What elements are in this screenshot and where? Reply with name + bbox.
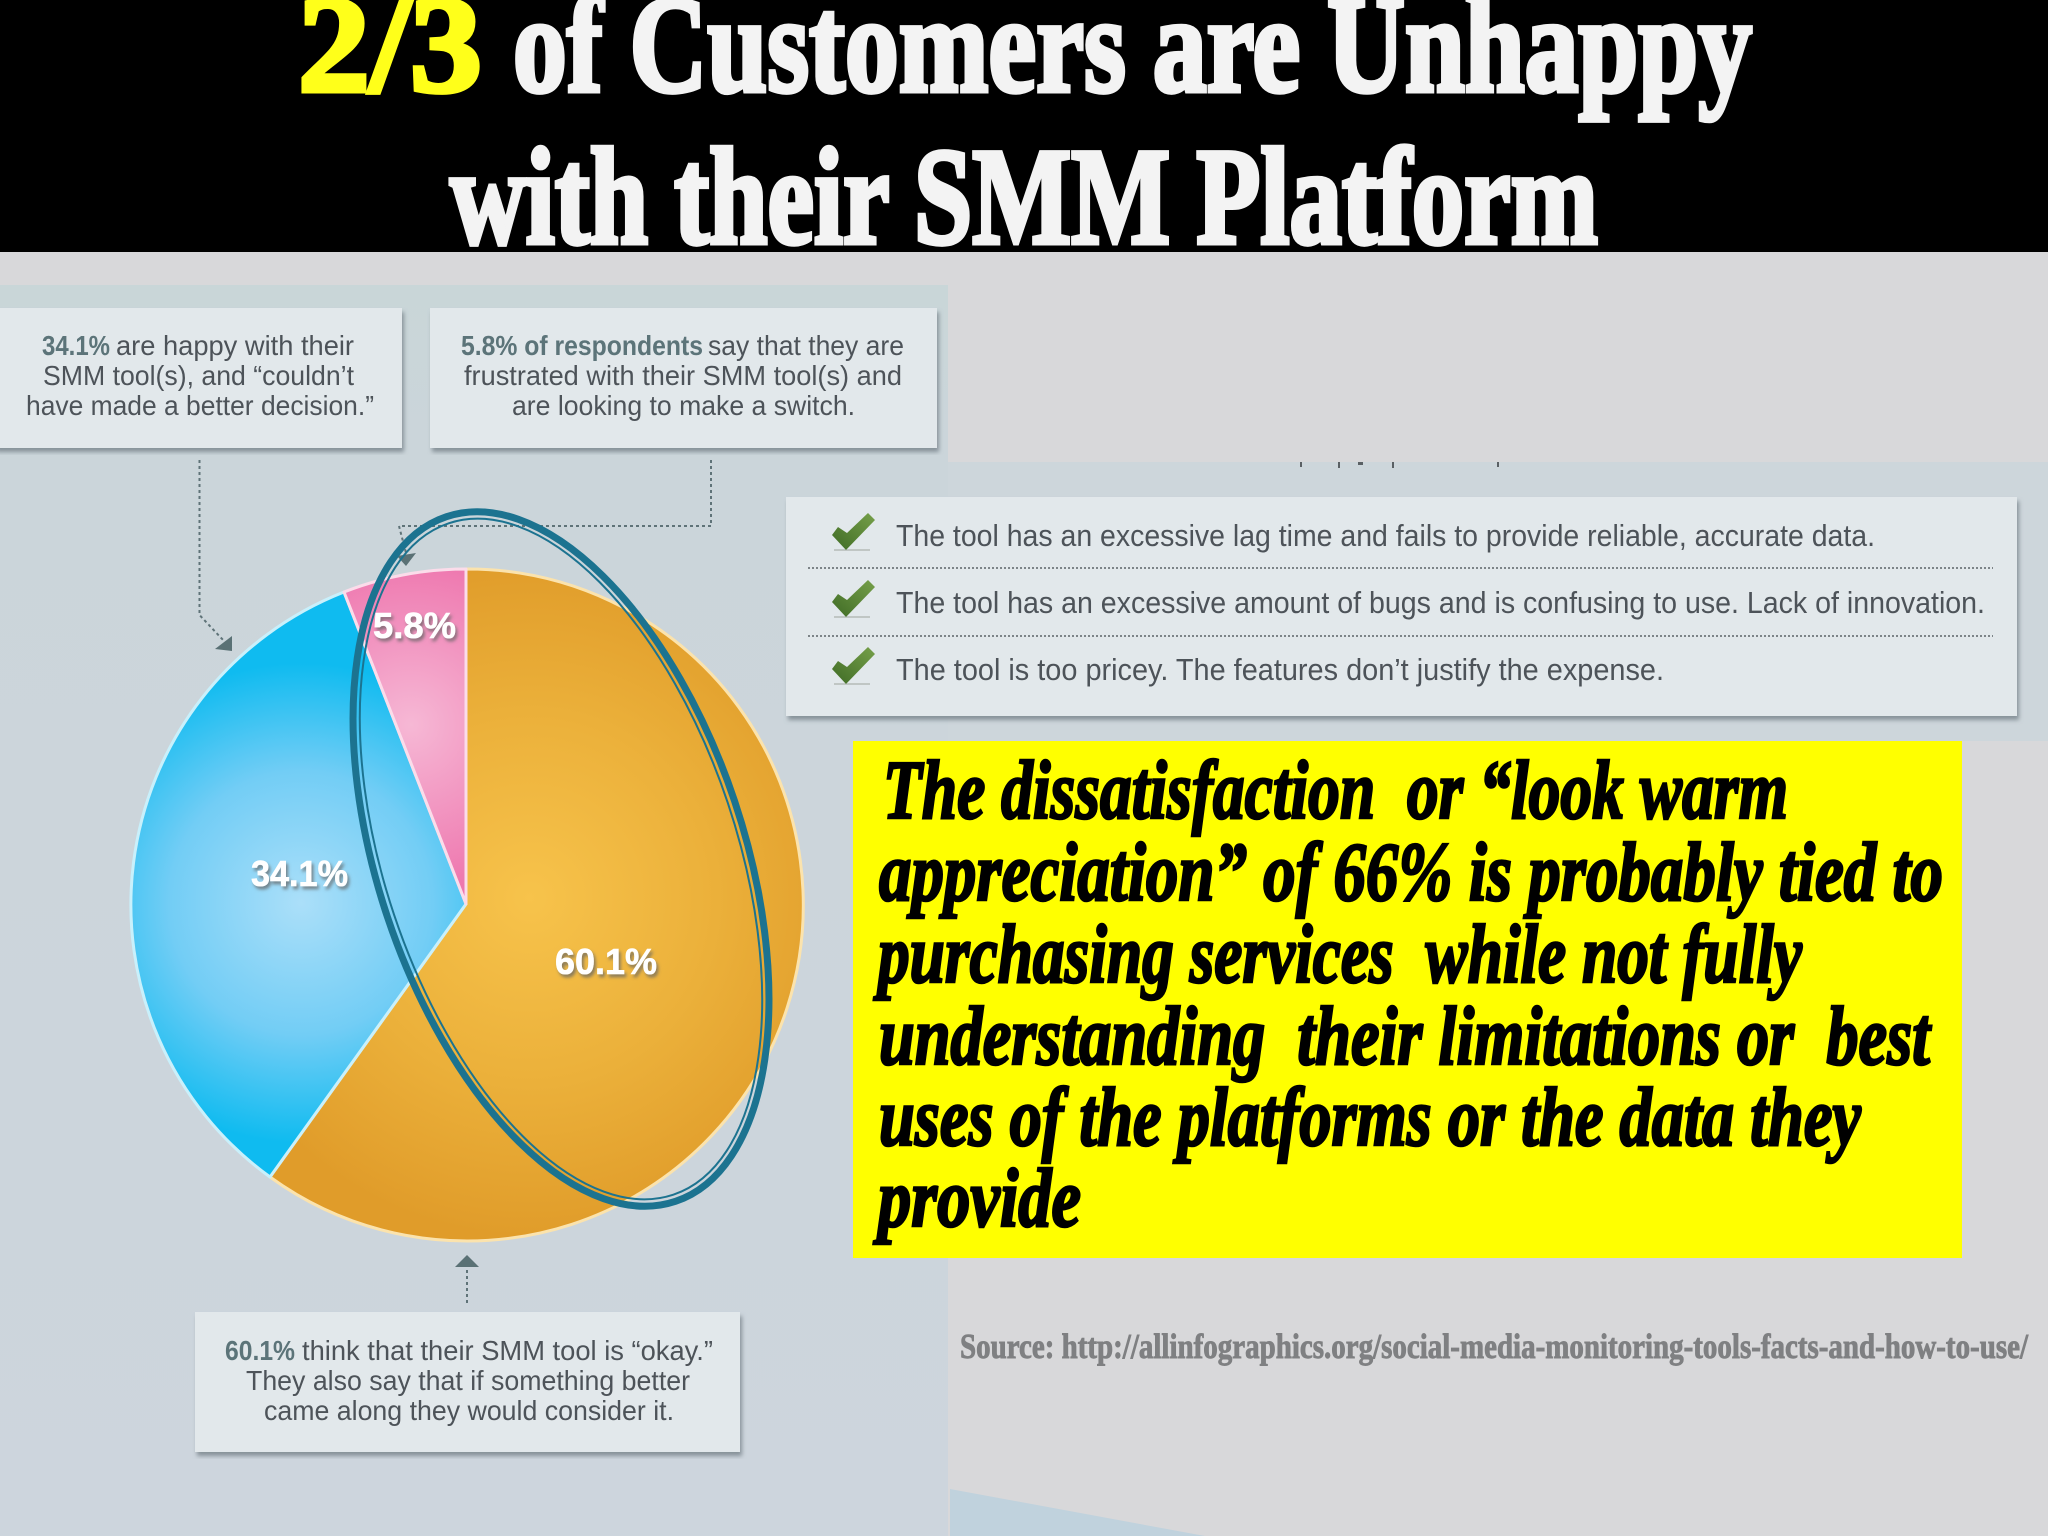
callout: 34.1% happy bbox=[0, 308, 402, 448]
callout: 5.8% frustrated bbox=[430, 308, 937, 448]
callout: 60.1% okay: They also say that if something better bbox=[246, 1365, 690, 1396]
label 5.8%: 5.8% bbox=[373, 605, 456, 646]
callout: 5.8% frustrated: are looking to make a switch. bbox=[512, 390, 855, 421]
slice: 5.8% frustrated bbox=[344, 569, 466, 904]
icon: check 2 bbox=[832, 580, 875, 618]
callout: 5.8% frustrated: 5.8% of respondents bbox=[461, 330, 703, 361]
left blue-grey panel bbox=[0, 285, 948, 1536]
icon: check 1 bbox=[832, 513, 875, 551]
icon: check 3 bbox=[832, 647, 875, 685]
arrow: 34.1% callout to pie bbox=[200, 460, 232, 651]
callout: 34.1% happy: 34.1% bbox=[42, 330, 110, 361]
yellow commentary box bbox=[853, 741, 1962, 1258]
title banner bbox=[0, 0, 2048, 273]
pie chart bbox=[131, 569, 803, 1241]
slice: 34.1% happy bbox=[131, 592, 466, 1177]
arrow: 5.8% callout to pie bbox=[397, 460, 711, 566]
yellow commentary box: provide bbox=[873, 1152, 1081, 1245]
title line 2: with their SMM Platform bbox=[450, 120, 1598, 273]
callout: 60.1% okay bbox=[195, 1312, 740, 1452]
reason 2: The tool has an excessive amount of bugs and is confusing to use. Lack of innovation. bbox=[896, 585, 1985, 620]
slice: 60.1% okay bbox=[270, 569, 803, 1241]
reason 3: The tool is too pricey. The features don’t justify the expense. bbox=[896, 652, 1664, 687]
label 34.1%: 34.1% bbox=[251, 853, 348, 894]
hand-drawn emphasis ellipse bbox=[273, 459, 849, 1259]
arrow: 60.1% callout to pie bbox=[455, 1255, 479, 1303]
blue wedge, bottom bbox=[950, 1489, 1205, 1536]
yellow commentary box: The dissatisfaction or “look warm bbox=[883, 744, 1788, 837]
callout: 60.1% okay: think that their SMM tool is “okay.” bbox=[302, 1335, 713, 1366]
callout: 60.1% okay: came along they would consider it. bbox=[264, 1395, 674, 1426]
reason 1: The tool has an excessive lag time and fails to provide reliable, accurate data. bbox=[896, 518, 1875, 553]
cropped text remnant bbox=[1300, 462, 1499, 468]
callout: 5.8% frustrated: frustrated with their SMM tool(s) and bbox=[464, 360, 902, 391]
right blue-grey panel behind reasons list bbox=[948, 462, 2048, 741]
callout: 60.1% okay: 60.1% bbox=[225, 1335, 295, 1366]
callout: 34.1% happy: have made a better decision.” bbox=[26, 390, 374, 421]
panel: reasons list bbox=[786, 497, 2017, 716]
callout: 5.8% frustrated: say that they are bbox=[708, 330, 904, 361]
callout: 34.1% happy: SMM tool(s), and “couldn’t bbox=[43, 360, 354, 391]
callout: 34.1% happy: are happy with their bbox=[116, 330, 354, 361]
label 60.1%: 60.1% bbox=[555, 941, 657, 982]
